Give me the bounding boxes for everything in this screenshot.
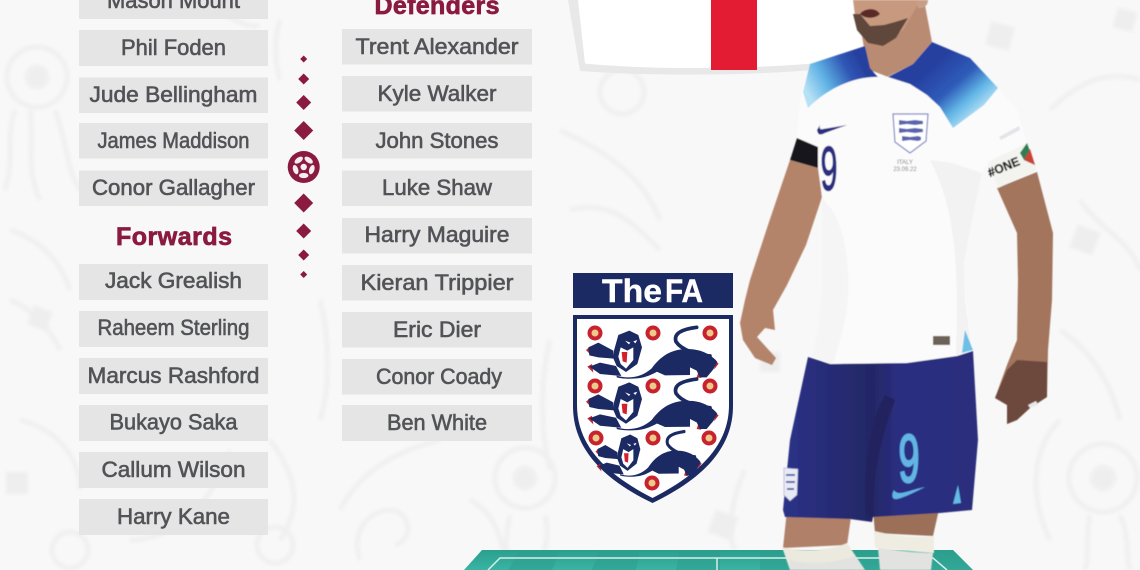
player: Callum Wilson: Callum Wilson <box>102 457 246 482</box>
panel: defenders list <box>342 0 532 441</box>
lion 3 <box>596 432 702 477</box>
blue yoke right <box>888 42 998 128</box>
right leg <box>873 505 940 570</box>
player: Luke Shaw: Luke Shaw <box>382 175 492 200</box>
player: Phil Foden <box>79 30 268 66</box>
player: Jude Bellingham <box>79 78 268 113</box>
The FA banner: The <box>602 273 662 309</box>
player: Kyle Walker <box>342 76 532 112</box>
player: Marcus Rashford <box>79 358 268 394</box>
lion 2 <box>586 379 719 430</box>
player: Marcus Rashford: Marcus Rashford <box>88 363 260 388</box>
The FA crest <box>573 273 733 503</box>
icon: football <box>288 151 320 183</box>
shorts swoosh <box>892 487 925 499</box>
head <box>853 0 928 46</box>
flag of England <box>568 0 880 75</box>
blue yoke left <box>803 46 878 108</box>
The FA banner <box>573 273 733 309</box>
player: John Stones: John Stones <box>376 128 498 153</box>
player: Raheem Sterling: Raheem Sterling <box>98 315 250 340</box>
left arm and hand <box>740 160 822 365</box>
The FA banner: FA <box>665 273 703 309</box>
panel: midfielders and forwards list <box>79 0 268 535</box>
shorts number: 9 <box>898 421 920 497</box>
lion 1 <box>586 327 719 379</box>
roses <box>588 326 718 490</box>
player: Luke Shaw <box>342 170 532 206</box>
player: Ben White <box>342 405 532 441</box>
swoosh <box>817 125 847 135</box>
player: Trent Alexander: Trent Alexander <box>356 34 518 59</box>
player: James Maddison <box>79 123 268 158</box>
player: Harry Kane <box>79 499 268 535</box>
football pitch <box>464 550 973 570</box>
player: Conor Gallagher <box>79 170 268 206</box>
player: Bukayo Saka <box>79 405 268 441</box>
player: Conor Coady <box>342 359 532 394</box>
heading: Forwards: Forwards <box>116 223 232 251</box>
shorts <box>783 351 978 522</box>
player: Jack Grealish <box>79 264 268 300</box>
player: Mason Mount <box>79 0 268 19</box>
player: Conor Gallagher: Conor Gallagher <box>92 175 255 200</box>
right arm and hand <box>995 172 1053 424</box>
captain armband: #ONE <box>986 154 1022 180</box>
shirt: 23.09.22 <box>893 167 917 173</box>
shorts badge <box>784 468 798 501</box>
player: Harry Maguire: Harry Maguire <box>364 222 510 247</box>
player: Eric Dier: Eric Dier <box>393 317 481 342</box>
player: Ben White: Ben White <box>387 410 487 435</box>
player: James Maddison: James Maddison <box>98 128 250 153</box>
player: Callum Wilson <box>79 452 268 488</box>
shield <box>573 315 733 503</box>
shirt: 9 <box>820 135 838 204</box>
captain armband <box>986 143 1037 188</box>
player: Bukayo Saka: Bukayo Saka <box>110 410 238 434</box>
player photo: Harry Kane <box>740 0 1053 570</box>
player: Harry Maguire <box>342 218 532 254</box>
red cross <box>711 0 757 70</box>
player: Kyle Walker: Kyle Walker <box>378 81 496 106</box>
player: John Stones <box>342 123 532 158</box>
player: Jack Grealish: Jack Grealish <box>105 268 242 293</box>
divider: diamonds and football <box>288 56 320 278</box>
black armband <box>790 138 818 168</box>
player: Phil Foden: Phil Foden <box>121 35 226 60</box>
shirt badge <box>893 114 928 153</box>
player: Kieran Trippier: Kieran Trippier <box>360 270 514 295</box>
shirt <box>790 42 1037 364</box>
player: Kieran Trippier <box>342 265 532 300</box>
left leg <box>782 510 865 570</box>
player: Trent Alexander <box>342 29 532 64</box>
neck <box>862 0 932 77</box>
player: Conor Coady: Conor Coady <box>376 364 502 389</box>
match detail text: ITALY <box>897 160 913 166</box>
player: Raheem Sterling <box>79 311 268 347</box>
player: Eric Dier <box>342 312 532 348</box>
player: Jude Bellingham: Jude Bellingham <box>90 82 258 107</box>
player: Harry Kane: Harry Kane <box>117 504 230 529</box>
